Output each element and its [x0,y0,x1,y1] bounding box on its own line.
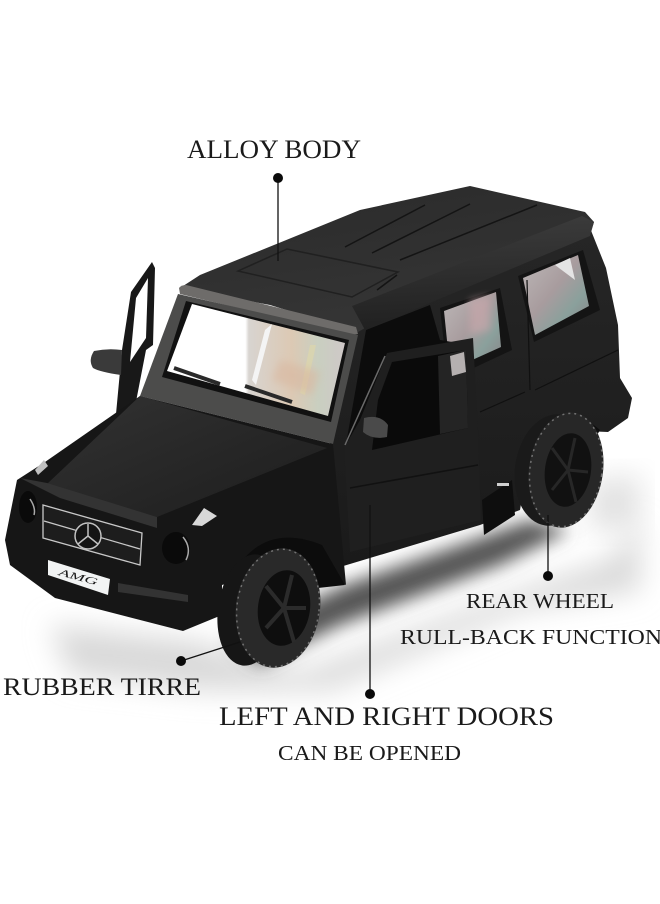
callout: rubber tire [3,642,240,701]
callout: doors [219,505,554,765]
AMG plate [48,560,110,595]
callout: doors: LEFT AND RIGHT DOORS [219,702,554,731]
open right door [344,338,481,552]
ground shadow [50,475,640,690]
headlights and indicators [19,460,217,564]
hood and fender [5,396,346,631]
callout: rear wheel: RULL-BACK FUNCTION [400,625,660,649]
body side [330,228,632,570]
callout: rubber tire: RUBBER TIRRE [3,674,201,701]
callout: doors: CAN BE OPENED [278,741,461,765]
windshield glass [167,304,345,416]
door sill [482,480,515,535]
side windows [440,250,600,380]
car [5,186,632,673]
roof side band [352,216,594,330]
door mirror [363,417,388,438]
star logo [75,523,101,549]
rear wheel [508,407,611,533]
roof lip [179,285,358,335]
body lines [480,280,618,412]
roof ribs and sunroof [238,204,537,297]
front wheel [211,538,345,673]
iridescent reflections [252,324,320,395]
AMG plate: AMG [55,567,99,588]
left mirror [91,349,122,375]
callout: alloy body [187,135,361,261]
callout: alloy body: ALLOY BODY [187,135,361,164]
open left door [91,262,155,414]
door opening [345,305,470,450]
callout: rear wheel [400,515,660,649]
bumper highlight [118,583,188,602]
grille [43,505,142,565]
callout: rear wheel: REAR WHEEL [466,589,614,613]
roof [180,186,594,332]
windshield frame [140,294,358,444]
wipers [174,368,292,402]
infographic: toy car with feature callouts [4,140,660,760]
